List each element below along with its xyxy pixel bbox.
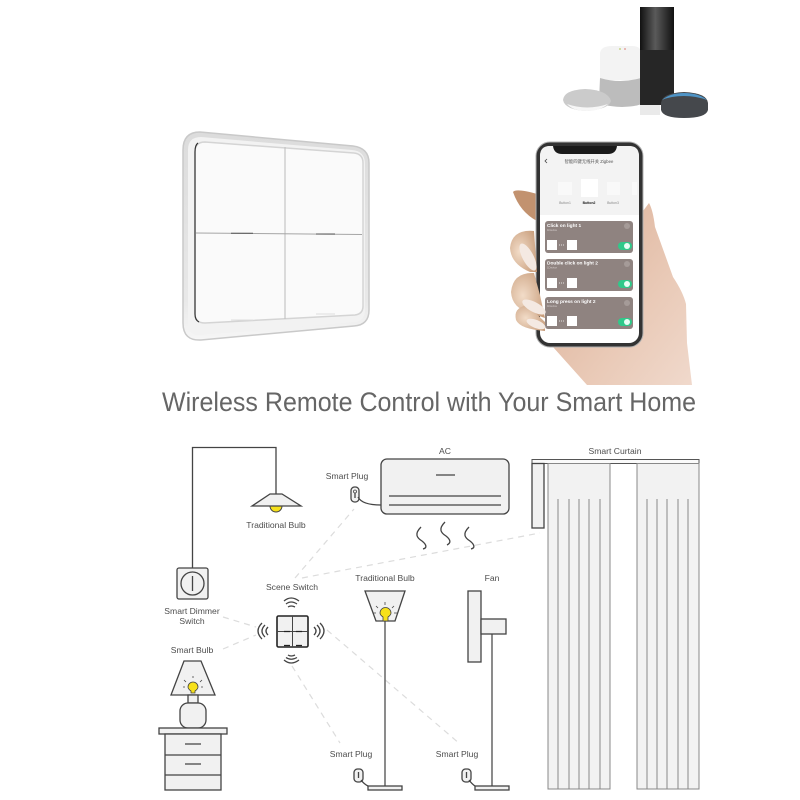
- phone screen: [540, 146, 639, 343]
- right curtain panel: [637, 464, 699, 789]
- air waves: [417, 522, 474, 549]
- connection lines: [223, 509, 540, 744]
- label: traditional bulb: Traditional Bulb: [246, 520, 306, 530]
- title: Wireless Remote Control with Your Smart Home: [162, 387, 696, 417]
- scene switch with wireless signals: [258, 582, 324, 663]
- table lamp with smart bulb: Smart Bulb: [171, 645, 213, 655]
- phone screen: 智能四键无线开关 Zigbee: [565, 158, 614, 165]
- smart dimmer switch: Switch: [179, 616, 205, 626]
- scene card 1: Click on light 1: [547, 223, 581, 229]
- wall switch product photo: [183, 132, 369, 340]
- scene card 2: 1Device: [547, 266, 558, 270]
- AC unit with smart plug: Smart Plug: [326, 471, 368, 481]
- speaker: Google Home: [599, 46, 643, 107]
- scene card 2: Double click on light 2: [547, 260, 598, 266]
- floor lamp with smart plug: Smart Plug: [330, 749, 372, 759]
- phone screen: Button3: [607, 201, 619, 205]
- scene card 3: [545, 297, 633, 329]
- smart speakers photo: [563, 7, 708, 118]
- scene switch with wireless signals: Scene Switch: [266, 582, 318, 592]
- traditional pendant bulb with wire: [192, 448, 306, 568]
- hand: [513, 190, 692, 385]
- floor lamp with smart plug: Traditional Bulb: [355, 573, 415, 583]
- label: AC: AC: [439, 446, 451, 456]
- speaker: Amazon Echo: [640, 7, 674, 115]
- smart plug: [351, 487, 381, 505]
- smart dimmer switch: Smart Dimmer: [164, 606, 220, 616]
- fingers and nails: [510, 231, 548, 331]
- table lamp with smart bulb: [159, 645, 227, 790]
- smart curtain: [532, 446, 699, 789]
- phone body: [536, 142, 643, 347]
- scene card 2: [545, 259, 633, 291]
- scene card 3: Long press on light 2: [547, 299, 596, 305]
- floor lamp with smart plug: [330, 573, 415, 790]
- phone screen: Button2: [583, 201, 596, 205]
- speaker: Echo Dot: [661, 92, 708, 118]
- scene card 1: 1Device: [547, 228, 558, 232]
- speaker: Google Home Mini: [563, 89, 611, 111]
- scene card 1: [545, 221, 633, 253]
- smart dimmer switch: [164, 568, 220, 626]
- smart curtain: Smart Curtain: [588, 446, 642, 456]
- fan with smart plug: Fan: [485, 573, 500, 583]
- signal arcs: [258, 598, 324, 663]
- phone in hand: [510, 142, 692, 385]
- fan with smart plug: [436, 573, 509, 790]
- switch buttons: [195, 142, 363, 323]
- left curtain panel: [548, 464, 610, 789]
- fan with smart plug: Smart Plug: [436, 749, 478, 759]
- AC unit with smart plug: [326, 446, 509, 549]
- phone screen: Button1: [559, 201, 571, 205]
- switch frame: [183, 132, 369, 340]
- scene card 3: 1Device: [547, 304, 558, 308]
